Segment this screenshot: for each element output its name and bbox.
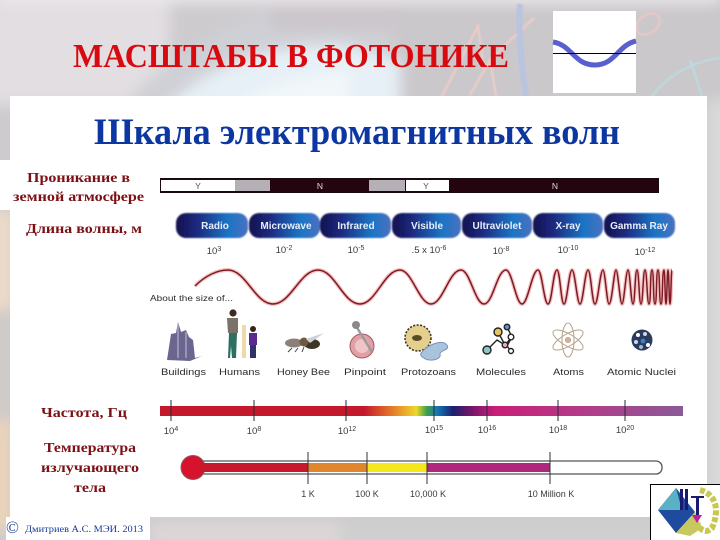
frequency scale: 16: [488, 425, 496, 432]
size labels: Molecules: [476, 367, 526, 378]
icon: molecules: [483, 324, 514, 354]
copyright: [6, 518, 143, 537]
left row labels: [13, 170, 144, 495]
size comparison icons: [167, 309, 652, 361]
atmosphere penetration bar: N: [552, 181, 558, 191]
frequency scale: 10: [425, 425, 435, 436]
frequency scale: 8: [257, 426, 261, 433]
wavelength values: -8: [503, 246, 510, 253]
frequency scale: 10: [164, 426, 174, 437]
icon: atomic nuclei: [632, 330, 652, 350]
left row labels: излучающего: [41, 460, 139, 475]
size labels: Buildings: [161, 367, 206, 378]
frequency scale: 20: [626, 425, 634, 432]
wave chirp: [195, 270, 672, 304]
wavelength values: 10: [635, 247, 645, 258]
spectrum band pills: Ultraviolet: [473, 221, 522, 232]
thermometer temperature scale: [181, 452, 662, 499]
atmosphere penetration bar: [160, 178, 658, 192]
wavelength values: 10: [558, 245, 568, 256]
copyright: ©: [6, 518, 19, 537]
spectrum band pills: Microwave: [260, 221, 312, 232]
icon: protozoans: [405, 325, 448, 360]
icon: humans: [227, 309, 257, 358]
about the size of label: About the size of...: [150, 293, 233, 303]
size labels: Pinpoint: [344, 367, 386, 378]
frequency scale: 10: [616, 425, 626, 436]
frequency scale: [160, 400, 683, 437]
icon: pinpoint: [350, 321, 374, 358]
wavelength values: -2: [286, 245, 293, 252]
size labels: [161, 367, 676, 378]
wavelength values: -12: [645, 247, 655, 254]
background doodles: [442, 4, 720, 96]
wavelength values: 3: [217, 246, 221, 253]
size labels: Atoms: [553, 367, 584, 378]
icon: atoms: [550, 323, 586, 357]
copyright: Дмитриев А.С. МЭИ. 2013: [25, 525, 143, 535]
left row labels: Частота, Гц: [41, 405, 127, 420]
left row labels: земной атмосфере: [13, 189, 144, 204]
atmosphere penetration bar: Y: [423, 181, 429, 191]
spectrum band pills: Radio: [201, 221, 229, 232]
spectrum band pills: Infrared: [337, 221, 375, 232]
icon: wave logo: [553, 11, 636, 93]
left row labels: Длина волны, м: [26, 221, 142, 236]
icon: honey bee: [285, 333, 324, 352]
frequency scale: 10: [338, 426, 348, 437]
frequency scale: 12: [348, 426, 356, 433]
size labels: Humans: [219, 367, 260, 378]
wavelength values: 10: [493, 246, 503, 257]
spectrum band pills: Gamma Ray: [610, 221, 668, 232]
frequency scale: 10: [247, 426, 257, 437]
wavelength values: 10: [276, 245, 286, 256]
frequency scale: 10: [478, 425, 488, 436]
wavelength values: [207, 245, 655, 258]
spectrum band pills: X-ray: [555, 221, 581, 232]
frequency scale: 10: [549, 425, 559, 436]
spectrum band pills: Visible: [411, 221, 443, 232]
wavelength values: .5 x 10: [412, 245, 440, 256]
size labels: Honey Bee: [277, 367, 330, 378]
thermometer temperature scale: 10,000 K: [410, 489, 446, 499]
title: МАСШТАБЫ В ФОТОНИКЕ: [73, 38, 509, 75]
thermometer temperature scale: 1 K: [301, 489, 315, 499]
wavelength values: -5: [358, 245, 365, 252]
wavelength values: 10: [348, 245, 358, 256]
wavelength values: -10: [568, 245, 578, 252]
left row labels: Проникание в: [27, 170, 130, 185]
wavelength values: -6: [440, 245, 446, 252]
thermometer temperature scale: 10 Million K: [528, 489, 574, 499]
frequency scale: 18: [559, 425, 567, 432]
icon: institute logo: [650, 484, 720, 540]
left row labels: тела: [74, 480, 106, 495]
left row labels: Температура: [44, 440, 136, 455]
thermometer temperature scale: 100 K: [355, 489, 379, 499]
size labels: Protozoans: [401, 367, 456, 378]
size labels: Atomic Nuclei: [607, 367, 676, 378]
wavelength values: 10: [207, 246, 217, 257]
subtitle: Шкала электромагнитных волн: [94, 112, 620, 153]
atmosphere penetration bar: N: [317, 181, 323, 191]
frequency scale: 4: [174, 426, 178, 433]
frequency scale: 15: [435, 425, 443, 432]
spectrum band pills: [176, 213, 675, 238]
icon: buildings: [167, 322, 202, 361]
atmosphere penetration bar: Y: [195, 181, 201, 191]
